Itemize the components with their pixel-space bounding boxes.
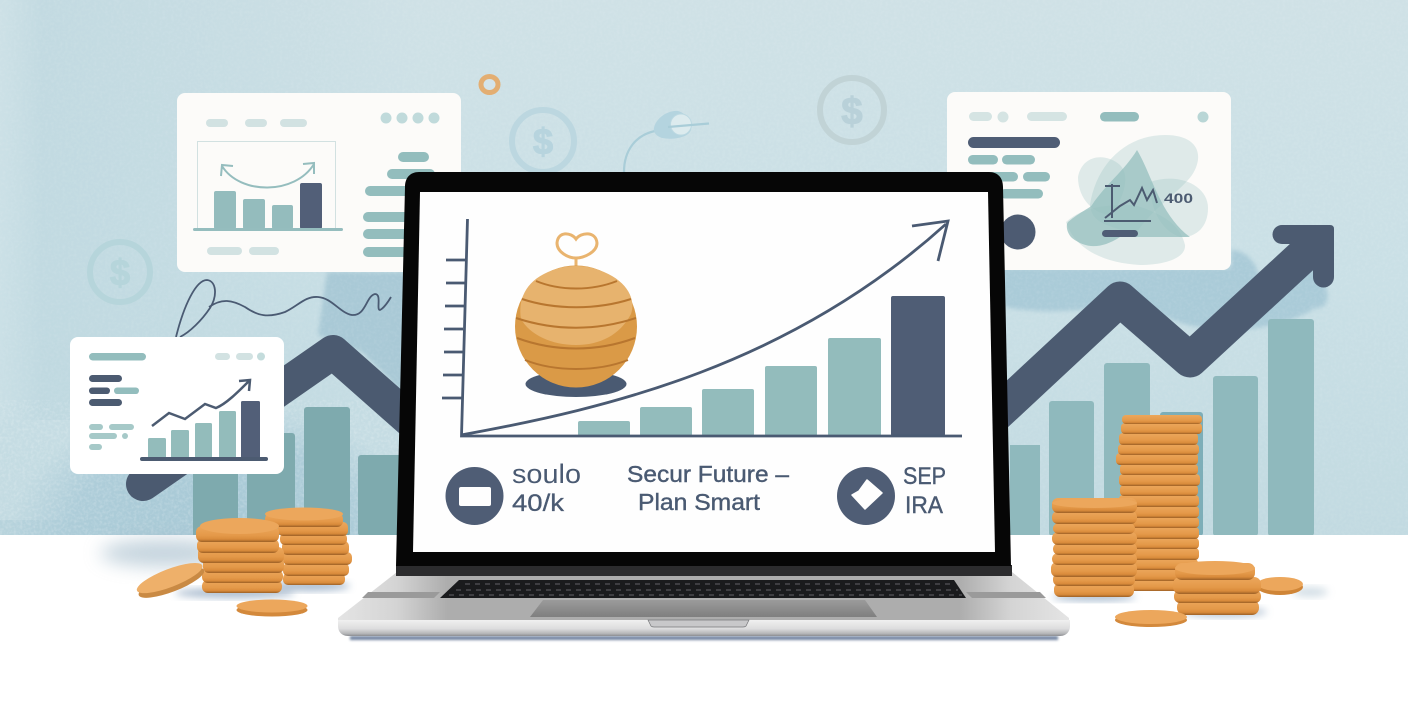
header pills (89, 352, 265, 360)
coin: tilted left (134, 557, 207, 604)
icon: dollar coin left: $ (110, 252, 130, 293)
right growth arrow (990, 225, 1334, 420)
footer pills (207, 247, 279, 255)
label: solo 401k: 40/k (512, 490, 565, 517)
screen headline: Secur Future – (627, 461, 789, 487)
right background bars (1010, 319, 1314, 536)
floor (0, 535, 1408, 704)
icon: dollar coin top (820, 78, 884, 142)
keyboard (440, 580, 966, 598)
text lines (968, 137, 1060, 250)
icon: mouse doodle (624, 111, 709, 172)
left background bars (193, 407, 403, 536)
coins: right tall stack (1116, 415, 1202, 591)
laptop base (338, 565, 1070, 636)
icon: dollar coin top: $ (841, 91, 863, 133)
icon: SEP IRA badge (837, 467, 895, 525)
laptop lid (396, 172, 1011, 566)
left growth arrow (143, 352, 410, 484)
coins: left front stack (175, 518, 295, 598)
coin: single far right (1257, 577, 1303, 595)
header pills (206, 119, 307, 127)
label: SEP IRA: SEP (903, 463, 946, 490)
bars (578, 296, 945, 436)
header dots (380, 112, 440, 124)
side pills (363, 152, 435, 257)
panel: top-left dashboard card (177, 93, 461, 272)
icon: dollar coin left (90, 242, 150, 302)
header pills (969, 112, 1067, 122)
value label: 400 (1164, 191, 1193, 206)
label: solo 401k: soulo (512, 459, 581, 489)
speaker grilles (362, 592, 1046, 598)
label: SEP IRA: IRA (905, 492, 943, 519)
coins: left rear stack (265, 508, 352, 591)
text lines (89, 375, 139, 450)
squiggle line (176, 280, 391, 337)
label: solo 401k (512, 459, 581, 517)
icon: dollar coin center (512, 110, 574, 172)
icon: dollar coin center: $ (533, 121, 553, 162)
coin: flat right (1115, 610, 1187, 627)
mountain blobs (1066, 135, 1208, 265)
screen headline: Plan Smart (638, 489, 761, 515)
laptop (338, 172, 1070, 636)
coins: right small stack (1173, 561, 1267, 617)
panel: top-right dashboard card (947, 92, 1231, 270)
chart on screen (442, 219, 962, 436)
screen (413, 192, 995, 552)
trackpad (530, 600, 877, 617)
coins: right front stack (1051, 498, 1137, 601)
coin: flat left (236, 600, 308, 616)
bar and line chart (140, 380, 268, 461)
bar chart (193, 142, 343, 231)
label: SEP IRA (903, 463, 946, 519)
axes (442, 219, 962, 436)
icon: 401k badge (446, 467, 504, 525)
panel: lower-left dashboard card (70, 337, 284, 474)
growth curve (461, 221, 948, 435)
front edge (338, 620, 1070, 636)
icon: piggy ball (515, 234, 637, 397)
screen headline (627, 461, 789, 515)
icon: small gold ring (481, 76, 498, 92)
